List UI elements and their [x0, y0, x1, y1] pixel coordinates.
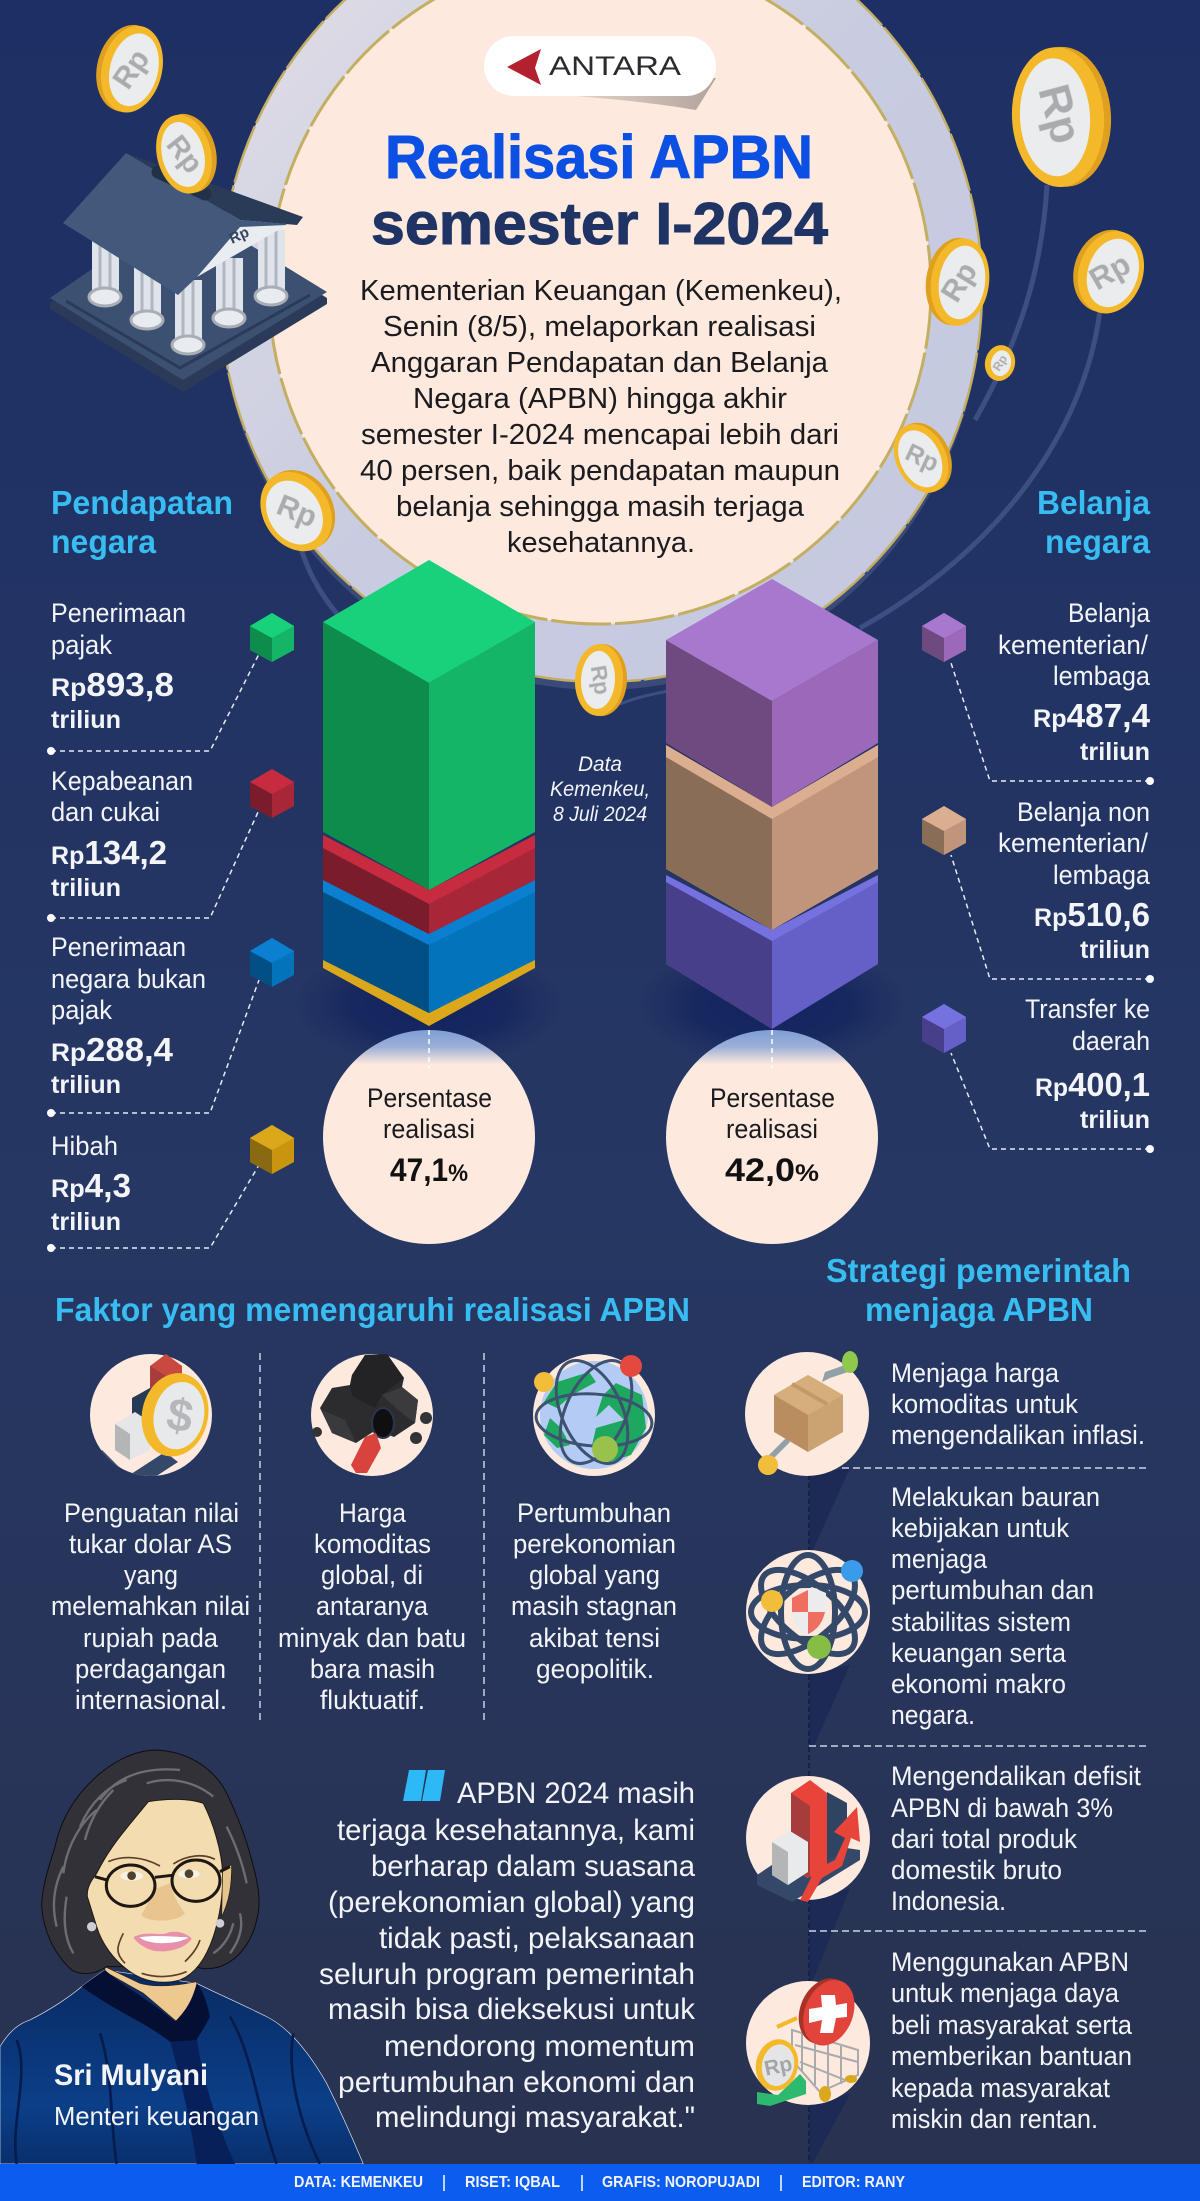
legend cube: tan: [922, 806, 966, 855]
icon: atom with shield: [746, 1550, 870, 1674]
quote text: mendorong momentum: [384, 2030, 695, 2063]
footer credits: RISET: IQBAL: [465, 2174, 560, 2191]
legend cube: green: [250, 613, 294, 662]
strategy text 2: stabilitas sistem: [891, 1607, 1071, 1637]
title: semester I-2024: [371, 191, 828, 257]
quote text: APBN 2024 masih: [457, 1777, 695, 1810]
intro paragraph: belanja sehingga masih terjaga: [396, 491, 805, 523]
item: belanja non kementerian/lembaga: [998, 797, 1150, 964]
leader dots: [47, 747, 1154, 1252]
strategy text 3: APBN di bawah 3%: [891, 1793, 1113, 1823]
item: belanja non kementerian/lembaga: Belanja non: [1017, 797, 1150, 827]
circle: persentase realisasi pendapatan: [323, 1030, 535, 1244]
factor text 3: akibat tensi: [529, 1623, 660, 1653]
heading: Faktor: Faktor yang memengaruhi realisasi APBN: [55, 1291, 690, 1328]
strategy text 4: memberikan bantuan: [891, 2041, 1132, 2071]
factor text 1: internasional.: [75, 1685, 227, 1715]
item: belanja kementerian/lembaga: kementerian/: [998, 630, 1149, 660]
item: penerimaan pajak: [51, 598, 186, 734]
intro paragraph: kesehatannya.: [507, 527, 695, 559]
item: kepabeanan dan cukai: triliun: [51, 874, 121, 902]
icon: bank building: Rp: [227, 224, 252, 248]
glasses: [95, 1860, 230, 1906]
jacket: [0, 1970, 363, 2164]
footer credits: DATA: KEMENKEU: [294, 2174, 423, 2191]
item: penerimaan negara bukan pajak: [51, 932, 206, 1099]
factor text 1: rupiah pada: [83, 1623, 218, 1653]
legend cube: purple: [922, 613, 966, 662]
item: penerimaan pajak: Penerimaan: [51, 598, 186, 628]
intro paragraph: Anggaran Pendapatan dan Belanja: [371, 347, 829, 379]
strategy text 1: [891, 1358, 1145, 1450]
coin: [982, 342, 1018, 384]
item: transfer ke daerah: Rp400,1: [1035, 1066, 1150, 1103]
legend cube: violet: [922, 1004, 966, 1053]
strategy text 2: negara.: [891, 1700, 975, 1730]
factor text 1: yang: [124, 1560, 178, 1590]
logo: ANTARA: [484, 36, 716, 110]
quote text: seluruh program pemerintah: [319, 1958, 695, 1991]
strategy text 3: Mengendalikan defisit: [891, 1761, 1142, 1791]
item: belanja non kementerian/lembaga: lembaga: [1053, 860, 1150, 890]
footer credits: EDITOR: RANY: [802, 2174, 905, 2191]
job title: Menteri keuangan: [54, 2101, 259, 2131]
strategy text 2: keuangan serta: [891, 1638, 1066, 1668]
coin trail lines: [300, 185, 1100, 704]
item: hibah: Hibah: [51, 1131, 118, 1161]
header circle: [220, 0, 982, 690]
item: belanja kementerian/lembaga: Belanja: [1068, 598, 1150, 628]
title: Realisasi APBN: [385, 123, 813, 191]
factor text 2: bara masih: [310, 1654, 435, 1684]
strategy text 3: dari total produk: [891, 1824, 1078, 1854]
factor text 1: melemahkan nilai: [51, 1591, 250, 1621]
intro paragraph: Kementerian Keuangan (Kemenkeu),: [360, 275, 842, 307]
heading: Pendapatan negara: negara: [51, 523, 157, 560]
intro paragraph: Negara (APBN) hingga akhir: [413, 383, 787, 415]
coin: Rp: [935, 257, 984, 308]
quote mark: [403, 1770, 445, 1801]
strategy text 1: komoditas untuk: [891, 1389, 1079, 1419]
circle: persentase realisasi belanja: [666, 1030, 878, 1244]
neck: [105, 1967, 198, 2022]
item: penerimaan negara bukan pajak: pajak: [51, 995, 113, 1025]
legend cube: blue: [250, 938, 294, 987]
icon: dollar coin: [90, 1354, 212, 1476]
intro paragraph: [360, 275, 842, 559]
item: penerimaan pajak: Rp893,8: [51, 666, 174, 703]
lips: [133, 1932, 192, 1951]
item: penerimaan negara bukan pajak: negara bukan: [51, 964, 206, 994]
icon: dollar coin: $: [163, 1387, 197, 1443]
factor text 1: [51, 1498, 250, 1715]
item: transfer ke daerah: triliun: [1080, 1106, 1150, 1134]
factor text 3: [511, 1498, 677, 1684]
quote text: masih bisa dieksekusi untuk: [328, 1993, 696, 2026]
strategy spine and shadows: [809, 1468, 850, 2163]
data source note: 8 Juli 2024: [553, 803, 647, 826]
item: transfer ke daerah: daerah: [1072, 1026, 1150, 1056]
quote text: melindungi masyarakat.": [375, 2101, 695, 2134]
item: hibah: [51, 1131, 131, 1236]
item: penerimaan negara bukan pajak: triliun: [51, 1071, 121, 1099]
strategy text 4: [891, 1947, 1132, 2134]
heading: Belanja negara: [1037, 484, 1151, 560]
icon: cardboard box: [745, 1351, 869, 1476]
circle: persentase realisasi pendapatan: 47,1%: [390, 1152, 468, 1188]
item: penerimaan pajak: triliun: [51, 706, 121, 734]
factor text 2: Harga: [339, 1498, 406, 1528]
icon: coal with price tag: [311, 1354, 433, 1476]
item: belanja kementerian/lembaga: lembaga: [1053, 661, 1150, 691]
factor text 1: perdagangan: [75, 1654, 226, 1684]
strategy text 2: ekonomi makro: [891, 1669, 1066, 1699]
quote text: berharap dalam suasana: [371, 1850, 695, 1883]
heading: Strategi: Strategi pemerintah: [826, 1252, 1131, 1289]
strategy text 1: Menjaga harga: [891, 1358, 1059, 1388]
strategy text 3: Indonesia.: [891, 1886, 1006, 1916]
item: kepabeanan dan cukai: Rp134,2: [51, 834, 167, 871]
coin: [148, 108, 225, 200]
data source note: [550, 753, 650, 826]
intro paragraph: 40 persen, baik pendapatan maupun: [360, 455, 840, 487]
coin: [920, 234, 995, 330]
coin: Rp: [586, 663, 615, 696]
factor text 2: fluktuatif.: [320, 1685, 425, 1715]
item: hibah: triliun: [51, 1208, 121, 1236]
item: penerimaan negara bukan pajak: Penerimaan: [51, 932, 186, 962]
coin: [573, 643, 629, 717]
factor text 3: global yang: [529, 1560, 660, 1590]
factor text 2: minyak dan batu: [278, 1623, 466, 1653]
stacked column: belanja: [666, 579, 878, 1029]
item: belanja non kementerian/lembaga: Rp510,6: [1034, 896, 1150, 933]
collar: [82, 1970, 210, 2042]
leader lines: [51, 654, 1150, 1248]
portrait: Sri Mulyani: [0, 1750, 363, 2164]
item: hibah: Rp4,3: [51, 1167, 131, 1204]
strategy text 2: Melakukan bauran: [891, 1482, 1100, 1512]
circle: persentase realisasi belanja: realisasi: [726, 1114, 818, 1144]
icon: globe: [533, 1349, 655, 1476]
item: transfer ke daerah: [1025, 994, 1150, 1134]
shadows under stacks: [294, 943, 907, 1067]
item: belanja kementerian/lembaga: [998, 598, 1151, 766]
item: kepabeanan dan cukai: Kepabeanan: [51, 766, 193, 796]
heading: Strategi: [826, 1252, 1131, 1328]
item: kepabeanan dan cukai: dan cukai: [51, 797, 160, 827]
factor text 3: Pertumbuhan: [517, 1498, 671, 1528]
coin: Rp: [272, 489, 322, 534]
icon: chart and red arrow: [746, 1776, 870, 1902]
strategy text 4: Menggunakan APBN: [891, 1947, 1129, 1977]
face: [87, 1799, 223, 1982]
name: Sri Mulyani: [54, 2059, 208, 2092]
legend cube: gold: [250, 1125, 294, 1174]
quote text: pertumbuhan ekonomi dan: [338, 2066, 695, 2099]
title: [371, 123, 828, 257]
icon: bank building: [50, 153, 327, 392]
footer credits: [0, 2164, 1200, 2201]
factor text 2: komoditas: [314, 1529, 431, 1559]
heading: Strategi: menjaga APBN: [865, 1291, 1093, 1328]
heading: Pendapatan negara: Pendapatan: [51, 484, 233, 521]
coin: Rp: [160, 130, 209, 180]
coin: Rp: [1083, 246, 1136, 297]
nose: [142, 1883, 185, 1921]
coin: [1063, 221, 1154, 322]
footer credits: GRAFIS: NOROPUJADI: [602, 2174, 760, 2191]
coin: Rp: [107, 43, 156, 95]
eyes: [120, 1871, 143, 1881]
strategy text 4: kepada masyarakat: [891, 2073, 1111, 2103]
strategy text 2: [891, 1482, 1100, 1730]
circle: persentase realisasi belanja: Persentase: [710, 1083, 835, 1113]
coin: [87, 18, 172, 119]
item: belanja non kementerian/lembaga: triliun: [1080, 936, 1150, 964]
circle: persentase realisasi belanja: 42,0 %: [725, 1152, 819, 1188]
data source note: Data: [578, 753, 622, 776]
item: penerimaan negara bukan pajak: Rp288,4: [51, 1031, 174, 1068]
coin: [883, 414, 963, 502]
logo: ANTARA: ANTARA: [549, 51, 681, 81]
strategy text 2: menjaga: [891, 1544, 987, 1574]
icon: shopping cart and medical badge: Rp: [762, 2052, 794, 2081]
data source note: Kemenkeu,: [550, 778, 650, 801]
coin: [1008, 44, 1115, 189]
earrings: [87, 1922, 96, 1931]
stacked column: pendapatan: [323, 560, 535, 1026]
factor text 3: geopolitik.: [536, 1654, 654, 1684]
strategy text 4: miskin dan rentan.: [891, 2104, 1098, 2134]
quote text: [319, 1777, 696, 2134]
coin: Rp: [990, 353, 1010, 373]
hair strands: [54, 1769, 247, 1953]
factor text 2: global, di: [321, 1560, 423, 1590]
strategy text 1: mengendalikan inflasi.: [891, 1420, 1145, 1450]
factor text 3: perekonomian: [513, 1529, 676, 1559]
item: belanja kementerian/lembaga: triliun: [1080, 738, 1150, 766]
item: belanja non kementerian/lembaga: kementerian/: [998, 828, 1149, 858]
heading: Belanja negara: negara: [1045, 523, 1151, 560]
circle: persentase realisasi pendapatan: Persentase: [367, 1083, 492, 1113]
center panel: [170, 2037, 235, 2164]
coin: Rp: [1028, 79, 1091, 149]
strategy text 3: domestik bruto: [891, 1855, 1062, 1885]
factor text 2: [278, 1498, 466, 1715]
circle: persentase realisasi pendapatan: realisasi: [383, 1114, 475, 1144]
item: penerimaan pajak: pajak: [51, 630, 113, 660]
factor text 1: tukar dolar AS: [69, 1529, 232, 1559]
quote text: tidak pasti, pelaksanaan: [379, 1922, 695, 1955]
jacket folds: [15, 2017, 320, 2164]
heading: Pendapatan negara: [51, 484, 233, 560]
strategy text 3: [891, 1761, 1142, 1916]
strategy text 4: untuk menjaga daya: [891, 1978, 1119, 2008]
intro paragraph: semester I-2024 mencapai lebih dari: [361, 419, 839, 451]
heading: Belanja negara: Belanja: [1037, 484, 1151, 521]
icon: shopping cart and medical badge: [746, 1970, 870, 2106]
coin: Rp: [901, 438, 943, 478]
quote text: (perekonomian global) yang: [328, 1886, 695, 1919]
factor text 3: masih stagnan: [511, 1591, 677, 1621]
hair: [42, 1750, 259, 1974]
coin: [246, 456, 350, 565]
quote text: terjaga kesehatannya, kami: [337, 1814, 695, 1847]
legend cube: red: [250, 769, 294, 818]
item: belanja kementerian/lembaga: Rp487,4: [1033, 697, 1151, 734]
factor text 2: antaranya: [316, 1591, 428, 1621]
item: kepabeanan dan cukai: [51, 766, 193, 902]
item: transfer ke daerah: Transfer ke: [1025, 994, 1150, 1024]
brows and wrinkles: [108, 1856, 215, 1977]
strategy text 2: pertumbuhan dan: [891, 1575, 1094, 1605]
intro paragraph: Senin (8/5), melaporkan realisasi: [383, 311, 816, 343]
strategy text 4: beli masyarakat serta: [891, 2010, 1132, 2040]
strategy text 2: kebijakan untuk: [891, 1513, 1070, 1543]
factor text 1: Penguatan nilai: [64, 1498, 239, 1528]
